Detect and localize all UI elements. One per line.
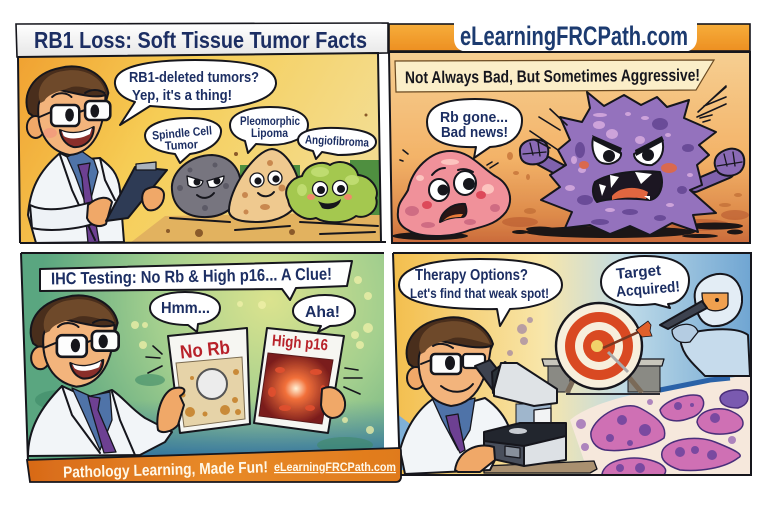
action lines (400, 86, 726, 168)
panel: RB1 loss title and tumors (15, 23, 388, 245)
card: No Rb: No Rb (179, 337, 231, 364)
caption banner (40, 261, 352, 300)
bubble: Hmm: Hmm... (161, 300, 210, 317)
hand holding left card (157, 388, 184, 432)
bubble: target acquired: Target (615, 262, 662, 283)
doctor at microscope (400, 317, 510, 474)
speech bubble: RB1-deleted: RB1-deleted tumors? (129, 69, 259, 86)
tumor: spindle cell (172, 155, 240, 217)
tumor: pleomorphic lipoma (229, 149, 300, 222)
sleeve and hands (30, 200, 107, 230)
panel outline (393, 253, 751, 475)
caption banner: Not Always Bad, But Sometimes Aggressive! (405, 66, 700, 87)
panel outline (389, 52, 750, 243)
bubble: Rb gone: Bad news! (441, 124, 508, 141)
card: No Rb (168, 328, 250, 433)
tumor cell clusters (591, 390, 748, 475)
speech bubble: RB1-deleted: Yep, it's a thing! (132, 87, 232, 104)
footer banner: Pathology Learning, Made Fun! (63, 459, 268, 482)
bubble: angiofibroma: Angiofibroma (305, 132, 370, 150)
head (26, 66, 110, 155)
bubble: Hmm (150, 292, 220, 332)
bubble: Rb gone: Rb gone... (440, 109, 508, 126)
tablet (106, 167, 167, 221)
purple spiky tumor (541, 92, 716, 235)
bubble: pleomorphic lipoma: Pleomorphic (240, 114, 300, 128)
scene background (388, 50, 752, 245)
bubble: pleomorphic lipoma (230, 107, 308, 153)
scene background (15, 50, 385, 245)
arm and fist: left (520, 140, 575, 178)
coat (400, 395, 510, 474)
bubble: spindle cell tumor: Spindle Cell (152, 123, 212, 143)
target with arrow (556, 303, 652, 389)
speech bubble: RB1-deleted (115, 60, 276, 125)
orange header strip (389, 24, 750, 51)
scientist in protective suit (660, 274, 750, 376)
title bar: RB1 Loss: Soft Tissue Tumor Facts (34, 27, 367, 53)
bubble: Rb gone (427, 99, 522, 158)
scene background (392, 252, 752, 478)
coat (28, 386, 172, 456)
action lines (146, 346, 362, 394)
panel: IHC testing (20, 252, 386, 467)
panel: not always bad (388, 21, 752, 245)
arm and fist: right (695, 149, 744, 186)
scene background (20, 252, 386, 467)
doctor holding cards (28, 295, 184, 456)
panel outline (21, 253, 384, 462)
tissue field (570, 375, 750, 478)
bubble: target acquired: Acquired! (615, 278, 681, 301)
microscope desk (484, 461, 597, 473)
head (407, 317, 493, 406)
hand holding right card (321, 387, 345, 418)
doctor with tablet (26, 66, 167, 243)
footer banner: eLearningFRCPath.com (274, 460, 396, 474)
caption banner (395, 60, 714, 92)
bubble: spindle cell tumor: Tumor (165, 137, 199, 153)
target stand (542, 359, 664, 394)
card: High p16: High p16 (271, 333, 329, 354)
panel: therapy options (392, 252, 752, 478)
bubble: therapy options (399, 259, 562, 326)
caption banner: IHC Testing: No Rb & High p16... A Clue! (51, 265, 332, 288)
microscope (475, 360, 566, 466)
title bar (16, 23, 388, 57)
bubble: therapy options: Therapy Options? (415, 267, 528, 284)
tumor: angiofibroma (286, 162, 377, 222)
pink tumor (398, 151, 510, 236)
coat (28, 153, 124, 243)
card: High p16 (254, 328, 344, 433)
bubble: Aha: Aha! (305, 304, 340, 321)
footer banner (27, 448, 401, 482)
panel outline (18, 53, 386, 243)
bubble: angiofibroma (298, 128, 376, 159)
bubble: target acquired (601, 256, 689, 308)
bubble: Aha (293, 295, 355, 332)
bubble: spindle cell tumor (145, 118, 221, 163)
logo plate: eLearningFRCPath.com (460, 21, 688, 51)
bubble: pleomorphic lipoma: Lipoma (251, 126, 288, 140)
head (31, 295, 119, 387)
bubble: therapy options: Let's find that weak spot! (410, 285, 549, 301)
hand on microscope (455, 446, 495, 472)
